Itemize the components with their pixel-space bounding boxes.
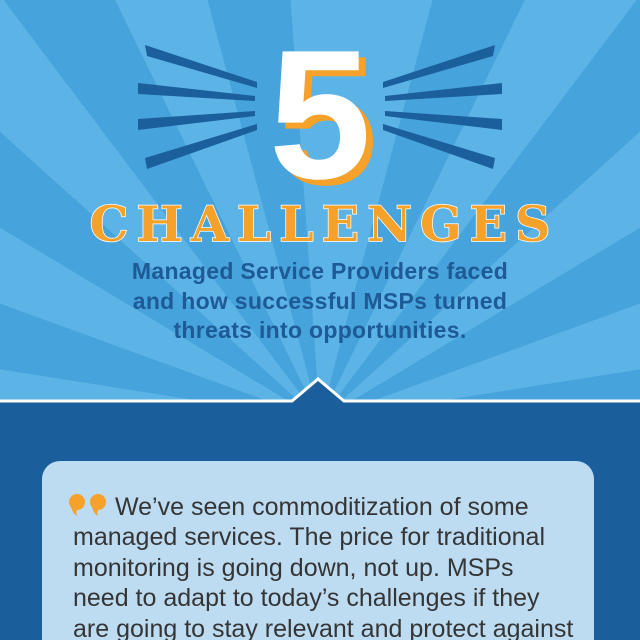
header panel: sunburst [0, 0, 640, 402]
quote text: managed services. The price for traditional [73, 523, 545, 551]
title: CHALLENGES: CHALLENGES [90, 195, 558, 253]
big number 5: 5 [276, 17, 378, 223]
big number 5: 5 [269, 11, 371, 217]
quote text [73, 492, 574, 640]
quote text: need to adapt to today’s challenges if they [73, 584, 540, 612]
quote text: monitoring is going down, not up. MSPs [73, 554, 514, 582]
quote box [42, 461, 594, 640]
subtitle: Managed Service Providers faced [132, 258, 508, 284]
subtitle [132, 258, 508, 343]
icon: burst dashes [138, 45, 502, 169]
quote text: We’ve seen commoditization of some [115, 492, 529, 520]
icon: quote marks [69, 494, 106, 516]
subtitle: threats into opportunities. [173, 317, 467, 343]
subtitle: and how successful MSPs turned [133, 288, 507, 314]
